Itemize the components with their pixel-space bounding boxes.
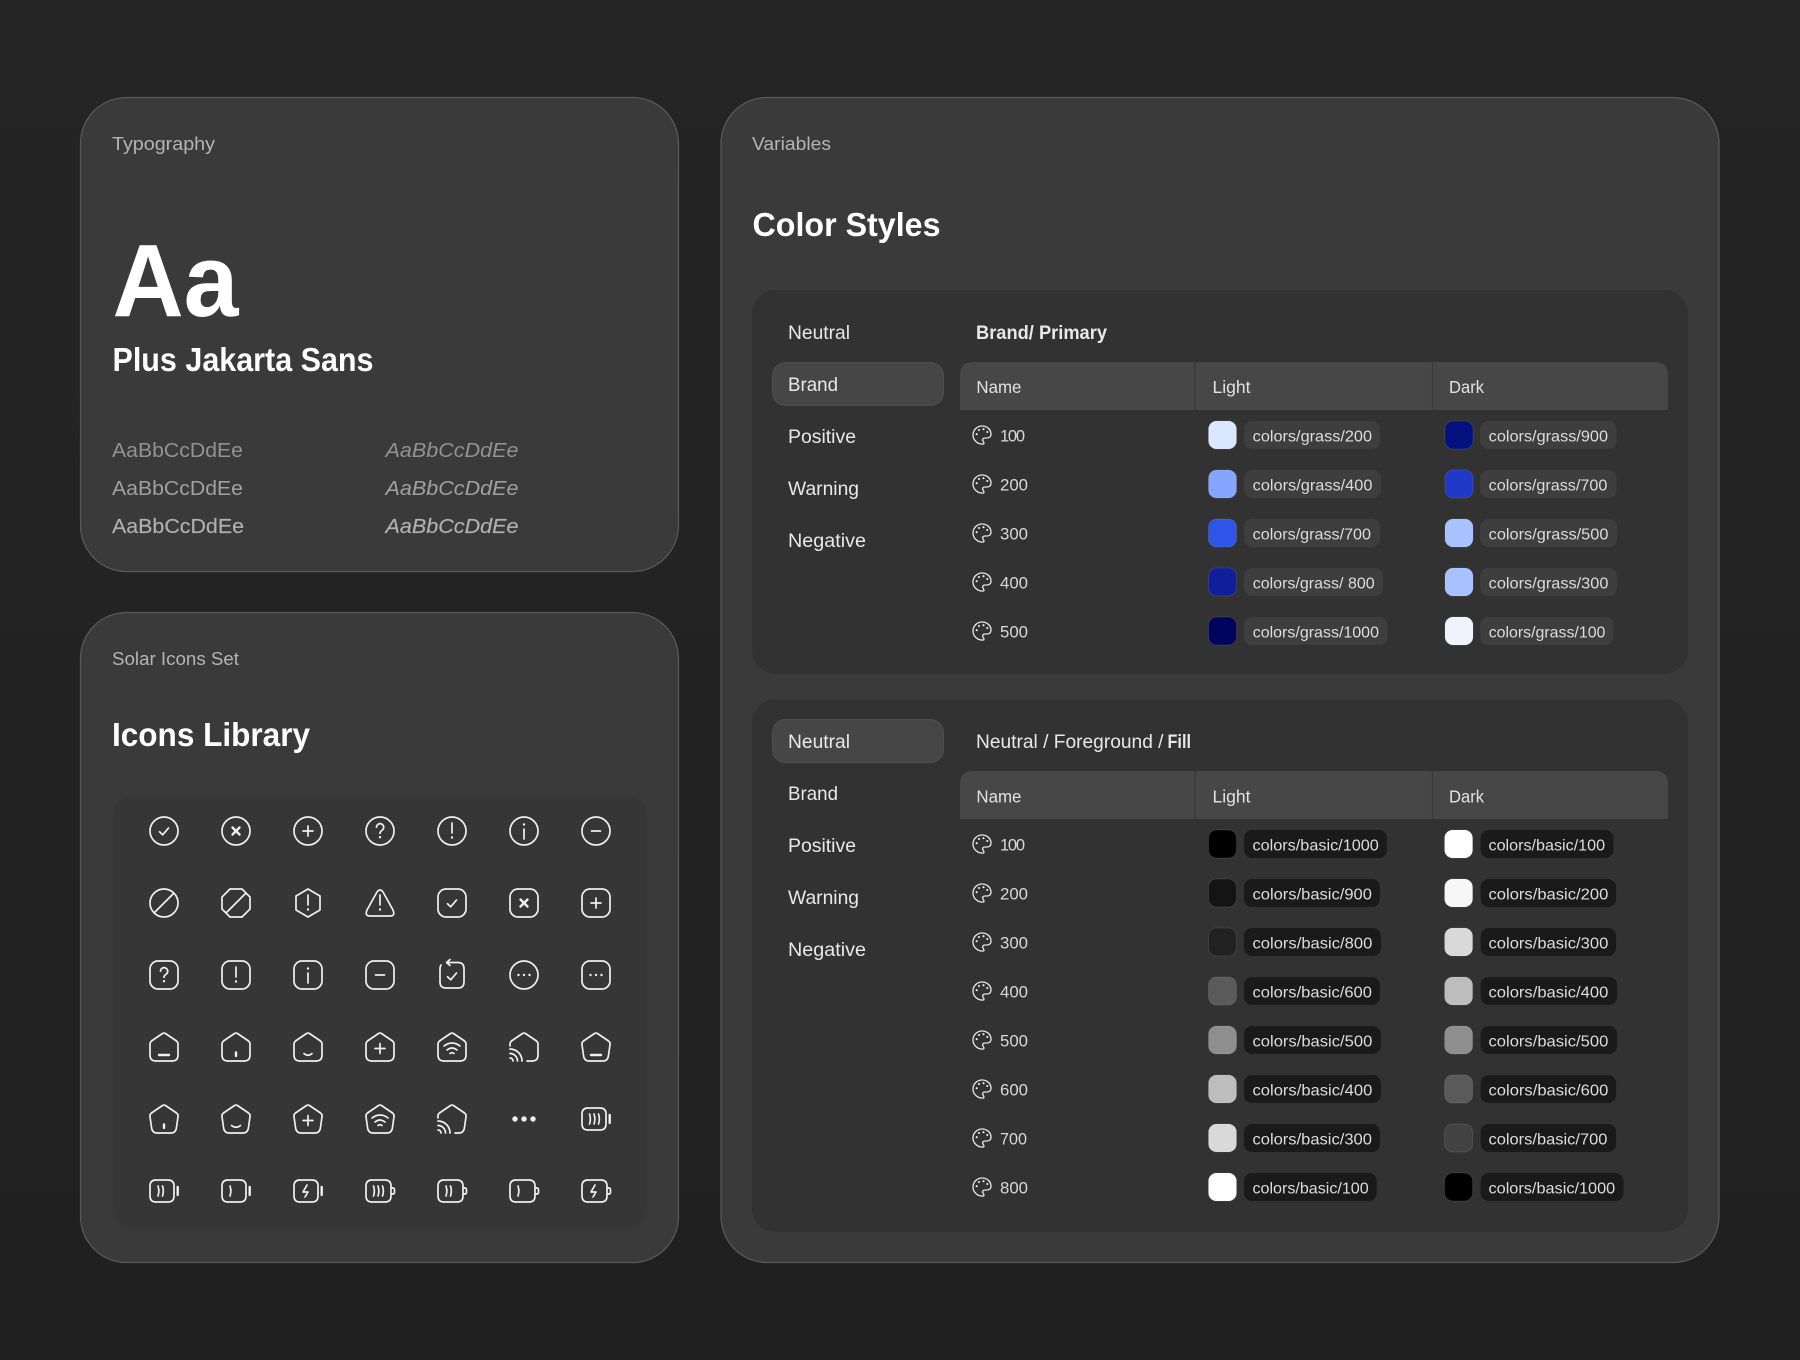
table title: Neutral / Foreground / Fill: Neutral / Foreground /: [976, 731, 1164, 753]
table row 800: 800: [1000, 1180, 1028, 1198]
table row 200: colors/basic/900: [1252, 886, 1372, 903]
icon: home cast: [510, 1033, 538, 1061]
table row 400: [973, 568, 1617, 596]
table row 200: [973, 879, 1616, 907]
icon: battery nub low: [510, 1180, 538, 1202]
table row 200: [973, 470, 1617, 498]
sidebar: categories: Negative: [788, 939, 866, 961]
table row 700: 700: [1000, 1130, 1027, 1148]
icon: home smile: [294, 1033, 322, 1061]
icon: forbidden circle: [150, 889, 178, 917]
sidebar: categories: Brand: [788, 374, 838, 396]
icon: danger square: [222, 961, 250, 989]
table row 400: colors/basic/600: [1252, 984, 1372, 1001]
table row 100: [973, 421, 1617, 449]
panel: icons library: [80, 612, 678, 1262]
text block: font weight samples: [112, 440, 518, 538]
table row 100: colors/basic/1000: [1252, 837, 1379, 854]
table row 300: colors/basic/300: [1488, 935, 1608, 952]
table row 200: colors/grass/700: [1489, 477, 1608, 494]
icon: question square: [150, 961, 178, 989]
panel: neutral foreground colors: [752, 699, 1688, 1232]
table header: [960, 362, 1668, 410]
table row 200: colors/basic/200: [1488, 886, 1608, 903]
table title: Brand / Primary: Brand/ Primary: [976, 322, 1107, 344]
table header: [960, 771, 1668, 819]
icon: home minus: [150, 1033, 178, 1061]
table header: Dark: [1449, 377, 1484, 397]
table row 100: colors/grass/900: [1489, 428, 1608, 445]
table row 500: [973, 617, 1613, 645]
table row 400: 400: [1000, 574, 1028, 592]
table row 100: 100: [1000, 836, 1025, 854]
table row 700: colors/basic/300: [1252, 1131, 1372, 1148]
icon: add circle: [294, 817, 322, 845]
table row 500: 500: [1000, 1032, 1028, 1050]
table row 200: 200: [1000, 476, 1028, 494]
icon: danger circle: [438, 817, 466, 845]
heading: Aa specimen: Aa: [112, 223, 239, 338]
sidebar: categories: Positive: [788, 426, 856, 448]
label: Typography: Typography: [112, 133, 216, 154]
table header: Light: [1212, 377, 1251, 397]
icon: pentagon minus: [582, 1033, 610, 1061]
icon: home add: [366, 1033, 394, 1061]
icon: minus square: [366, 961, 394, 989]
icon: check square with return arrow: [440, 960, 464, 988]
sidebar: categories: Warning: [788, 478, 859, 500]
table row 100: colors/basic/100: [1488, 837, 1605, 854]
icon: close circle: [222, 817, 250, 845]
table row 800: [973, 1173, 1624, 1201]
heading: Icons Library: Icons Library: [112, 716, 311, 753]
text block: font weight samples: AaBbCcDdEe: [112, 516, 244, 538]
table row 500: [973, 1026, 1617, 1054]
table row 300: colors/basic/800: [1252, 935, 1372, 952]
icon: battery half: [150, 1180, 178, 1202]
icon: more circle: [510, 961, 538, 989]
icon: pentagon smile: [222, 1105, 250, 1133]
table row 400: [973, 977, 1617, 1005]
table header: Name: [976, 786, 1021, 806]
table header: Name: [976, 377, 1021, 397]
table row 200: 200: [1000, 886, 1028, 904]
sidebar: categories: Neutral: [788, 322, 850, 344]
sidebar: categories: Neutral: [788, 731, 850, 753]
panel: variables: [721, 98, 1719, 1262]
sidebar: categories: [772, 720, 944, 961]
table row 100: [973, 830, 1613, 858]
table header: Light: [1212, 786, 1251, 806]
table row 100: 100: [1000, 428, 1025, 446]
icon: check square: [438, 889, 466, 917]
table row 700: colors/basic/700: [1488, 1131, 1607, 1148]
icon: close square: [510, 889, 538, 917]
sidebar: categories: Warning: [788, 887, 859, 909]
icon: battery low: [222, 1180, 250, 1202]
icon: check circle: [150, 817, 178, 845]
table row 800: colors/basic/1000: [1488, 1180, 1615, 1197]
icon: danger hexagon: [296, 889, 320, 917]
text block: font weight samples: AaBbCcDdEe: [384, 440, 518, 462]
icon: more square: [582, 961, 610, 989]
table row 500: 500: [1000, 624, 1028, 642]
icon: pentagon add: [294, 1105, 322, 1133]
icon grid: [113, 796, 647, 1230]
text block: font weight samples: AaBbCcDdEe: [112, 440, 243, 462]
table row 400: colors/basic/400: [1488, 984, 1608, 1001]
table row 300: 300: [1000, 934, 1028, 952]
icon: danger triangle: [366, 890, 394, 916]
table row 400: 400: [1000, 984, 1028, 1002]
table row 500: colors/basic/500: [1252, 1033, 1372, 1050]
panel: typography: [80, 98, 678, 572]
panel: brand primary colors: [752, 290, 1688, 674]
icon: pentagon cast: [438, 1105, 466, 1133]
sidebar: categories: Positive: [788, 835, 856, 857]
table row 300: [973, 519, 1617, 547]
icon: info circle: [510, 817, 538, 845]
icon: battery charge: [294, 1180, 322, 1202]
icon: question circle: [366, 817, 394, 845]
label: Solar Icons Set: Solar Icons Set: [112, 648, 239, 669]
table row 600: [973, 1075, 1616, 1103]
text block: font weight samples: AaBbCcDdEe: [384, 516, 518, 538]
table row 800: colors/basic/100: [1252, 1180, 1369, 1197]
table row 600: colors/basic/400: [1252, 1082, 1372, 1099]
icon: pentagon wifi: [366, 1105, 394, 1133]
icon: forbidden octagon: [222, 889, 250, 917]
text block: font weight samples: AaBbCcDdEe: [112, 478, 243, 500]
icon: three dots: [512, 1116, 536, 1122]
table row 100: colors/grass/200: [1253, 428, 1372, 445]
icon: battery full: [582, 1108, 610, 1130]
table row 600: colors/basic/600: [1488, 1082, 1608, 1099]
table row 400: colors/grass/ 800: [1253, 575, 1375, 592]
table row 500: colors/basic/500: [1488, 1033, 1608, 1050]
table row 200: colors/grass/400: [1253, 477, 1373, 494]
table row 500: colors/grass/100: [1489, 624, 1606, 641]
icon: info square: [294, 961, 322, 989]
icon: minus circle: [582, 817, 610, 845]
heading: Color Styles: Color Styles: [752, 206, 940, 243]
sidebar: categories: [772, 322, 944, 552]
text block: font weight samples: AaBbCcDdEe: [384, 478, 518, 500]
table row 300: colors/grass/500: [1489, 526, 1609, 543]
table header: Dark: [1449, 786, 1484, 806]
icon: battery nub charge: [582, 1180, 610, 1202]
table row 300: [973, 928, 1616, 956]
icon: add square: [582, 889, 610, 917]
sidebar: categories: Negative: [788, 530, 866, 552]
table row 300: colors/grass/700: [1253, 526, 1371, 543]
table row 500: colors/grass/1000: [1253, 624, 1379, 641]
table row 600: 600: [1000, 1082, 1028, 1100]
table title: Neutral / Foreground / Fill: Fill: [1168, 731, 1191, 753]
icon: home short line: [222, 1033, 250, 1061]
icon: home wifi: [438, 1033, 466, 1061]
icon: battery nub full: [366, 1180, 394, 1202]
label: Variables: Variables: [752, 133, 831, 154]
table row 700: [973, 1124, 1616, 1152]
sidebar: categories: Brand: [788, 783, 838, 805]
table row 300: 300: [1000, 526, 1028, 544]
icon: battery nub half: [438, 1180, 466, 1202]
heading: font name: Plus Jakarta Sans: [112, 341, 374, 378]
icon: pentagon short line: [150, 1105, 178, 1133]
table row 400: colors/grass/300: [1489, 575, 1609, 592]
